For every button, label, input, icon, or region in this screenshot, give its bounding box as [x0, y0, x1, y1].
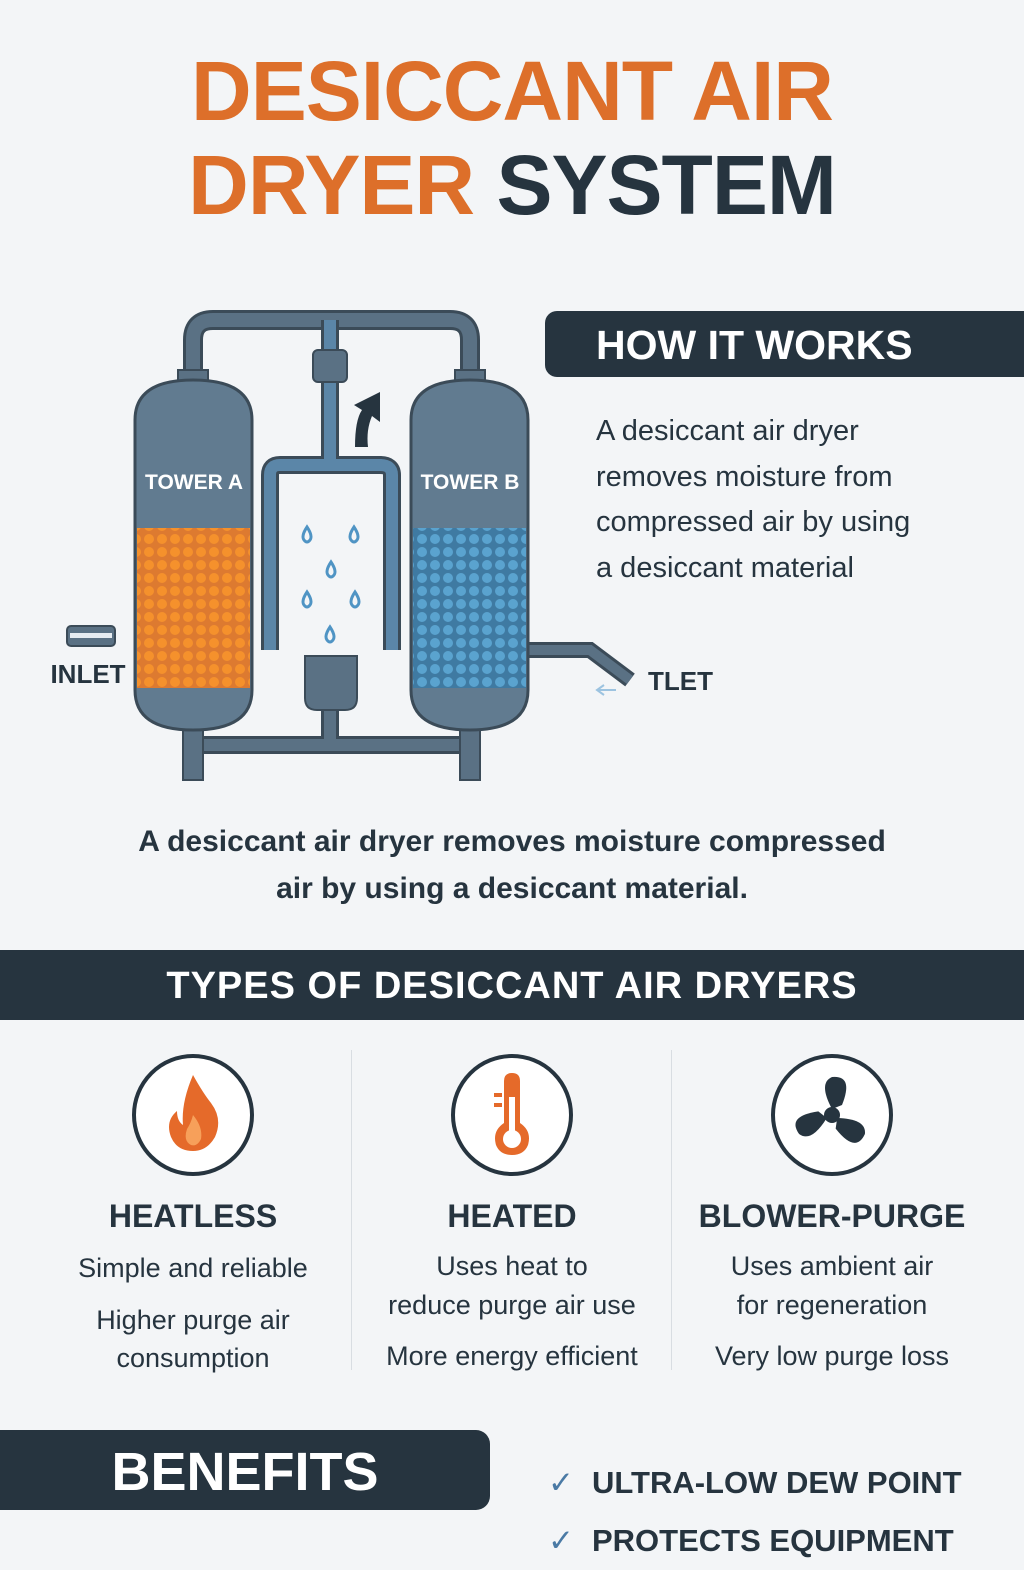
inlet	[67, 626, 115, 646]
benefits list	[548, 1465, 962, 1558]
panel: blower-purge: BLOWER-PURGE	[699, 1198, 965, 1234]
panel: heated: reduce purge air use	[388, 1290, 636, 1320]
arrow up	[354, 392, 380, 447]
caption: air by using a desiccant material.	[276, 872, 748, 905]
icon: thermometer	[451, 1054, 573, 1176]
panel: blower-purge	[699, 1054, 965, 1371]
benefits list: ✓ ULTRA-LOW DEW POINT	[548, 1465, 962, 1500]
icon: flame	[132, 1054, 254, 1176]
panel: heatless: consumption	[116, 1343, 270, 1373]
filter cup	[305, 656, 357, 710]
panel: heated: Uses heat to	[436, 1251, 588, 1281]
how it works text: removes moisture from	[596, 460, 893, 492]
panel: heated	[386, 1054, 638, 1371]
tower A	[135, 370, 252, 730]
panel: heatless: Higher purge air	[96, 1305, 290, 1335]
how it works text: A desiccant air dryer	[596, 415, 859, 447]
title: DESICCANT AIR	[191, 44, 833, 138]
how it works heading: HOW IT WORKS	[596, 322, 913, 368]
panel: heatless: Simple and reliable	[78, 1253, 308, 1283]
diagram: twin tower dryer	[50, 310, 713, 781]
how it works text: a desiccant material	[596, 552, 854, 584]
how it works text	[596, 415, 910, 584]
panel: blower-purge: for regeneration	[737, 1290, 927, 1320]
panel: heated: More energy efficient	[386, 1341, 638, 1371]
tower A: TOWER A	[145, 471, 243, 494]
types heading bar: TYPES OF DESICCANT AIR DRYERS	[166, 965, 858, 1007]
water drops	[303, 527, 359, 642]
caption: A desiccant air dryer removes moisture compressed	[138, 825, 886, 858]
panel: heatless	[78, 1054, 308, 1373]
tower B: TOWER B	[421, 471, 519, 494]
icon: fan	[771, 1054, 893, 1176]
caption	[138, 825, 886, 905]
panel: blower-purge: Very low purge loss	[715, 1341, 949, 1371]
tower B	[411, 370, 528, 730]
benefits list: ✓ PROTECTS EQUIPMENT	[548, 1523, 954, 1558]
panel: blower-purge: Uses ambient air	[731, 1251, 933, 1281]
benefits heading	[0, 1430, 490, 1510]
diagram: twin tower dryer: INLET	[50, 659, 126, 689]
benefits heading: BENEFITS	[111, 1442, 379, 1502]
how it works text: compressed air by using	[596, 506, 910, 538]
panel: heatless: HEATLESS	[109, 1198, 277, 1234]
diagram: twin tower dryer: TLET	[648, 666, 713, 696]
panel: heated: HEATED	[447, 1198, 577, 1234]
how it works heading	[545, 311, 1024, 377]
types heading bar	[0, 950, 1024, 1020]
title: DRYER SYSTEM	[188, 138, 836, 232]
title	[188, 44, 836, 232]
